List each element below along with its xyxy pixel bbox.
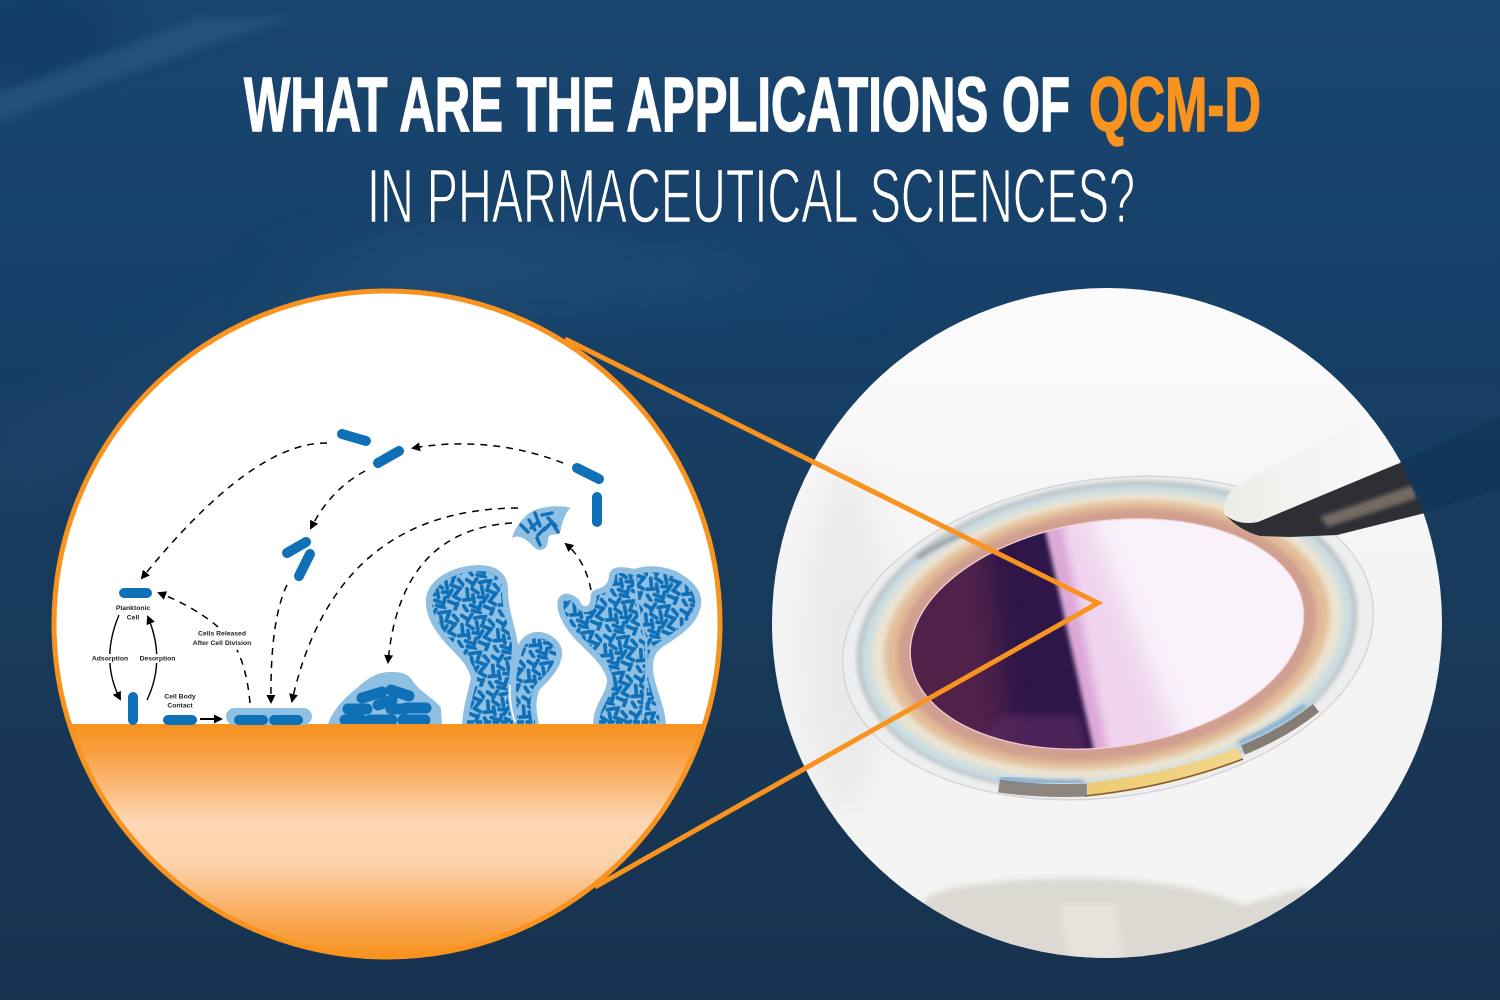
panel: biofilm diagram — [40, 291, 740, 964]
electrode: gold strip — [1088, 753, 1240, 789]
biofilm: mushroom two — [510, 635, 559, 725]
bacteria rods — [124, 434, 599, 720]
iridescent rings — [854, 478, 1360, 793]
diagram labels: After Cell Division — [193, 640, 251, 647]
title — [244, 62, 1261, 240]
diagram labels: Cell — [127, 614, 139, 622]
dividing cells film — [226, 708, 312, 725]
wafer rim — [910, 518, 1304, 750]
diagram labels: Cell Body — [164, 694, 196, 700]
diagram labels: Contact — [167, 702, 193, 710]
diagram labels — [91, 605, 251, 710]
diagram circle background — [54, 291, 720, 957]
electrode: grey left — [999, 786, 1087, 790]
electrode: upper left — [917, 534, 962, 558]
biofilm: large eroding colony — [560, 569, 698, 725]
diagram labels: Cells Released — [198, 630, 246, 638]
diagram labels: Desorption — [140, 656, 175, 662]
diagram labels: Planktonic — [116, 605, 150, 612]
biofilm: mushroom one — [429, 568, 516, 725]
glass disc — [842, 476, 1374, 800]
biofilm: detached fragment — [512, 506, 571, 550]
biofilm: flat mound — [328, 672, 442, 725]
diagram clipped content — [72, 506, 702, 954]
tweezer dark metal — [1224, 462, 1425, 537]
tweezer shadow beyond circle — [1400, 417, 1500, 513]
active wafer surface — [910, 519, 1304, 749]
electrode: blue edge left — [1000, 778, 1083, 782]
QCM sensor disc — [842, 476, 1374, 800]
orange substrate — [72, 724, 702, 954]
attached base cells row — [467, 720, 656, 724]
diagram outline — [54, 291, 720, 957]
panel: sensor photo — [772, 288, 1442, 960]
diagram labels: Adsorption — [92, 656, 128, 662]
electrode: grey right — [1243, 708, 1316, 750]
electrode: blue edge right — [1238, 705, 1305, 743]
solid process arrows — [110, 615, 221, 719]
zoom callout lines — [565, 339, 1098, 887]
dashed dispersal arrows — [142, 443, 591, 703]
tweezer white pad — [1224, 459, 1401, 523]
table reflection — [922, 876, 1309, 958]
title highlight: QCM-D — [1089, 62, 1261, 148]
tweezer — [1224, 459, 1424, 537]
